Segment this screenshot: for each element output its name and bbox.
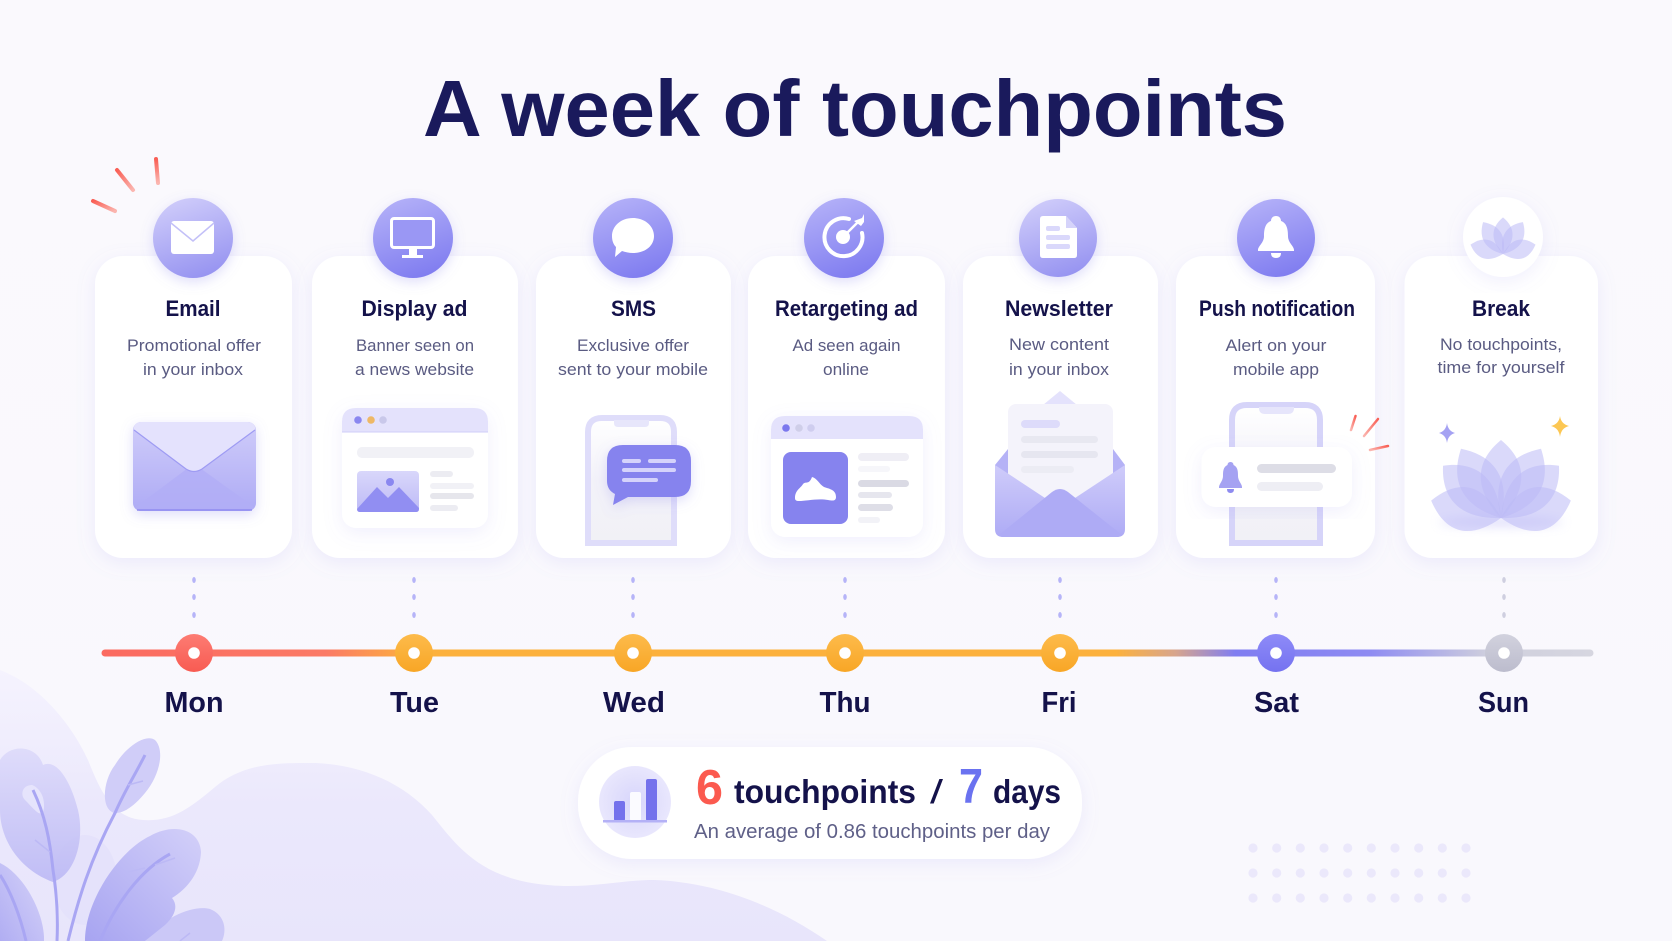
day labels: Sun <box>1478 687 1529 719</box>
panel: Tuesday display ad card <box>312 198 518 558</box>
illustration: browser with banner <box>342 408 488 528</box>
description: display ad: a news website <box>355 360 474 379</box>
icon: display monitor circle <box>373 198 453 278</box>
illustration: phone with notification <box>1202 405 1388 543</box>
description: push notification <box>1226 336 1327 379</box>
statistic headline: days <box>993 773 1061 810</box>
illustration: open envelope with letter <box>995 391 1125 537</box>
icon: email circle <box>153 198 233 278</box>
panel: Sunday break card <box>1404 197 1598 558</box>
description: display ad <box>355 336 474 379</box>
heading: Push notification: Push notification <box>1199 296 1355 321</box>
heading: Email: Email <box>166 296 220 321</box>
marker: Tuesday <box>395 634 433 672</box>
day labels: Tue <box>390 687 439 719</box>
description: break: No touchpoints, <box>1440 335 1562 354</box>
card background <box>1176 256 1375 558</box>
panel: Monday email card <box>95 198 292 558</box>
marker: Thursday <box>826 634 864 672</box>
heading: Retargeting ad: Retargeting ad <box>775 296 918 321</box>
illustration: lotus with sparkles <box>1426 416 1576 539</box>
description: retargeting ad: online <box>823 360 869 379</box>
icon: document circle <box>1019 199 1097 277</box>
background wave blob <box>0 670 827 941</box>
card background <box>1404 256 1598 558</box>
description: retargeting ad: Ad seen again <box>792 336 900 355</box>
statistic headline: 7 <box>959 760 983 814</box>
heading: SMS: SMS <box>611 296 656 321</box>
illustration: closed envelope <box>133 422 256 511</box>
decorative dot grid <box>1248 843 1471 903</box>
description: email: Promotional offer <box>127 336 261 355</box>
heading: Display ad: Display ad <box>362 296 468 321</box>
timeline with day markers <box>105 634 1590 672</box>
panel: Wednesday SMS card <box>536 198 731 558</box>
marker: Saturday <box>1257 634 1295 672</box>
description: break: time for yourself <box>1438 358 1565 377</box>
icon: lotus circle <box>1463 197 1543 277</box>
description: SMS <box>558 336 708 379</box>
card background <box>963 256 1158 558</box>
icon: bar chart <box>599 766 671 838</box>
day labels <box>164 687 1529 719</box>
illustration: phone with message <box>588 418 691 543</box>
description: push notification: Alert on your <box>1226 336 1327 355</box>
icon: speech bubble circle <box>593 198 673 278</box>
day labels: Fri <box>1042 687 1076 719</box>
description: email <box>127 336 261 379</box>
card background <box>748 256 945 558</box>
card background <box>95 256 292 558</box>
icon: bell circle <box>1237 199 1315 277</box>
statistic headline: / <box>930 773 944 810</box>
summary pill <box>578 747 1082 859</box>
decorative plant leaves <box>0 738 224 941</box>
description: push notification: mobile app <box>1233 360 1319 379</box>
heading: Break: Break <box>1472 296 1531 321</box>
marker: Monday <box>175 634 213 672</box>
illustration: browser with product <box>771 416 923 537</box>
card background <box>536 256 731 558</box>
marker: Sunday <box>1485 634 1523 672</box>
panel: Saturday push notification card <box>1176 199 1388 558</box>
description: newsletter: in your inbox <box>1009 360 1110 379</box>
marker: Friday <box>1041 634 1079 672</box>
connector dots: cards to timeline <box>192 577 1506 618</box>
panel: Friday newsletter card <box>963 199 1158 558</box>
pill background <box>578 747 1082 859</box>
statistic headline: touchpoints <box>734 773 916 810</box>
day labels: Mon <box>164 687 224 719</box>
day labels: Sat <box>1254 687 1299 719</box>
statistic subtext: An average of 0.86 touchpoints per day <box>694 821 1050 843</box>
panel: Thursday retargeting ad card <box>748 198 945 558</box>
statistic headline: 6 <box>696 761 723 815</box>
description: newsletter: New content <box>1009 335 1109 354</box>
card background <box>312 256 518 558</box>
description: retargeting ad <box>792 336 900 379</box>
description: SMS: Exclusive offer <box>577 336 689 355</box>
icon: red attention sparks <box>93 159 158 211</box>
day labels: Wed <box>603 687 665 719</box>
description: display ad: Banner seen on <box>356 336 474 355</box>
description: email: in your inbox <box>143 360 244 379</box>
heading: Newsletter: Newsletter <box>1005 296 1113 321</box>
day labels: Thu <box>820 687 870 719</box>
icon: target circle <box>804 198 884 278</box>
statistic headline <box>696 760 1061 815</box>
description: SMS: sent to your mobile <box>558 360 708 379</box>
description: break <box>1438 335 1565 377</box>
title: A week of touchpoints <box>423 64 1287 153</box>
description: newsletter <box>1009 335 1110 379</box>
marker: Wednesday <box>614 634 652 672</box>
timeline line <box>105 650 1590 656</box>
